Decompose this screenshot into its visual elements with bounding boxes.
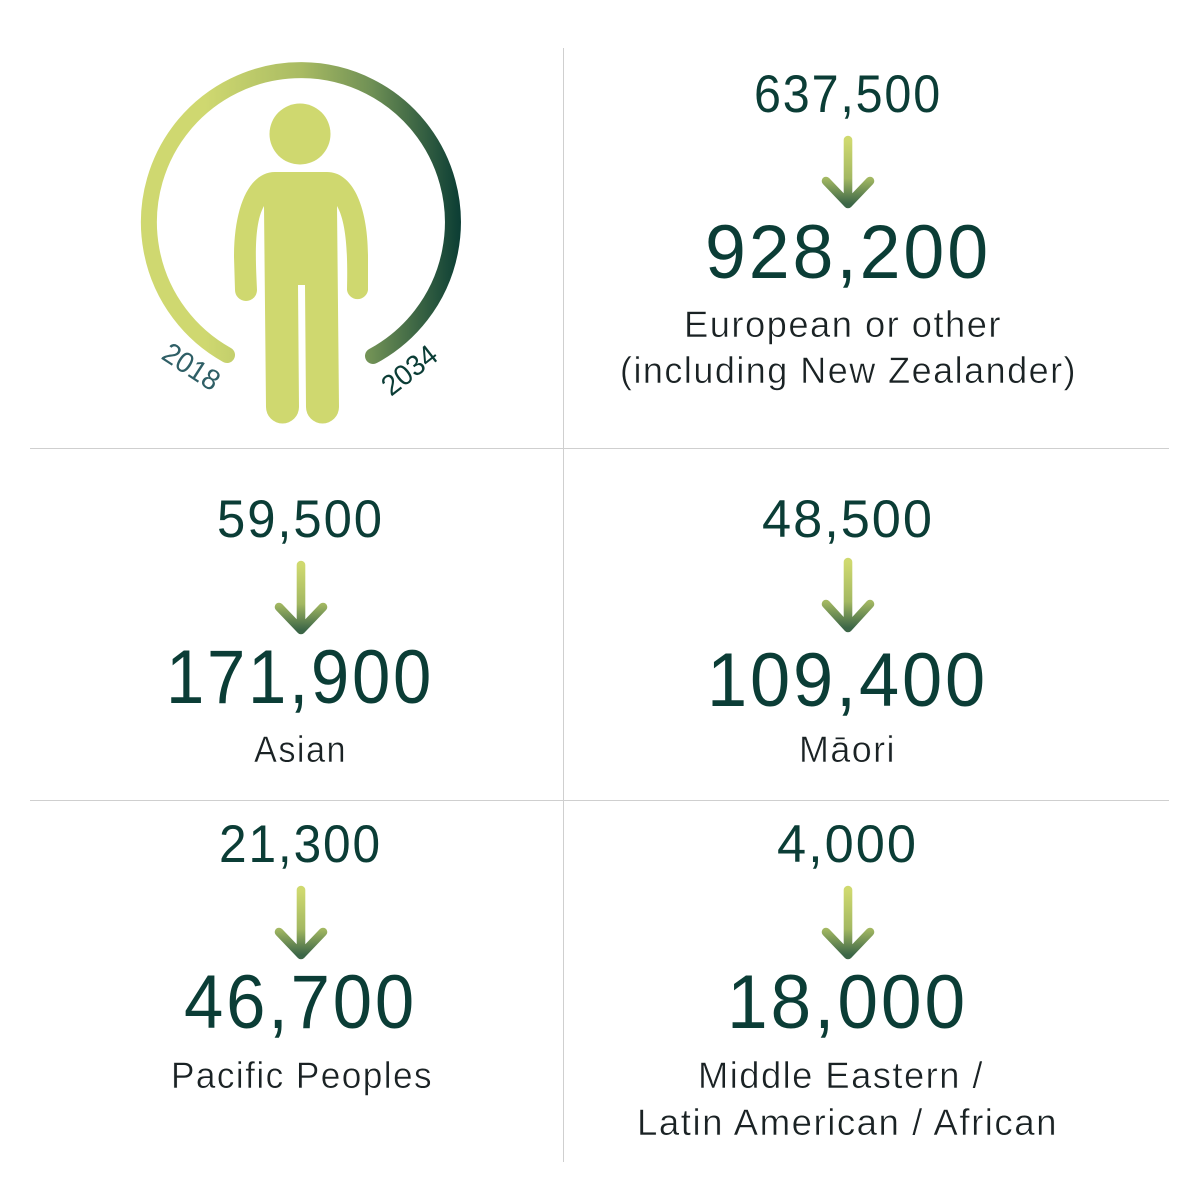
number: 2018 value: 4,000 bbox=[777, 815, 918, 874]
panel: person icon with 2018 to 2034 ring bbox=[149, 70, 453, 424]
arrow bbox=[279, 890, 323, 955]
panel: Asian bbox=[166, 490, 434, 770]
arrow bbox=[279, 565, 323, 630]
panel: European or other bbox=[620, 65, 1077, 391]
arrow bbox=[826, 140, 870, 204]
label: Asian bbox=[254, 729, 347, 770]
arrow bbox=[826, 890, 870, 955]
panel: Pacific Peoples bbox=[171, 815, 433, 1096]
number: 2018 value: 21,300 bbox=[219, 815, 382, 874]
icon: gradient ring bbox=[149, 70, 453, 356]
number: 2018 value: 637,500 bbox=[754, 65, 942, 124]
number: 2018 value: 48,500 bbox=[762, 490, 934, 549]
number: 2034 value: 46,700 bbox=[184, 960, 417, 1045]
label: second line: Latin American / African bbox=[637, 1102, 1058, 1143]
panel: Middle Eastern / Latin American / African bbox=[637, 815, 1058, 1143]
label: 2034: 2034 bbox=[376, 339, 444, 403]
icon: person bbox=[234, 104, 368, 424]
label: Pacific Peoples bbox=[171, 1055, 433, 1096]
number: 2034 value: 928,200 bbox=[705, 210, 991, 295]
label: Middle Eastern / bbox=[698, 1055, 984, 1096]
number: 2034 value: 18,000 bbox=[727, 960, 968, 1045]
label: Māori bbox=[799, 729, 896, 770]
number: 2034 value: 171,900 bbox=[166, 635, 434, 720]
arrow bbox=[826, 562, 870, 628]
label: European or other bbox=[684, 304, 1002, 345]
number: 2034 value: 109,400 bbox=[707, 638, 988, 723]
label: second line: (including New Zealander) bbox=[620, 350, 1077, 391]
number: 2018 value: 59,500 bbox=[217, 490, 384, 549]
panel: Maori bbox=[707, 490, 988, 770]
label: 2018: 2018 bbox=[156, 337, 226, 398]
